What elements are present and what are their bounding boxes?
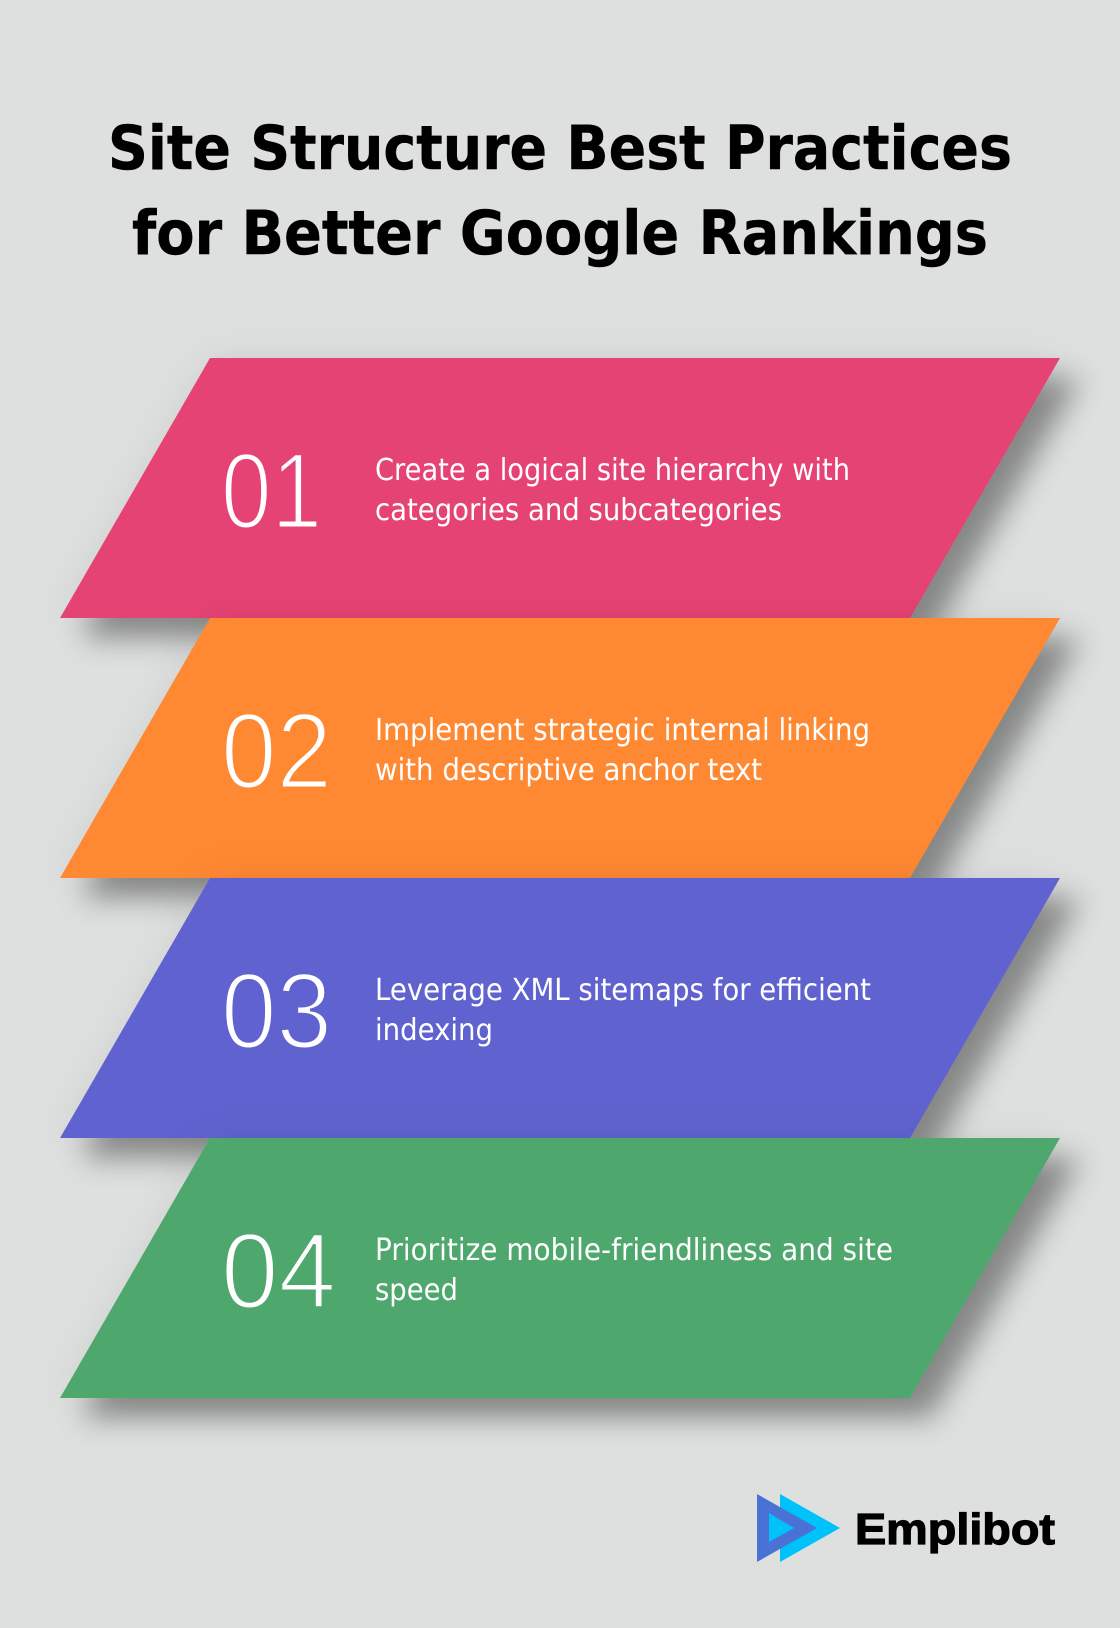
- wordmark: Emplibot: [855, 1505, 1055, 1554]
- logo: Emplibot: [757, 1494, 1055, 1562]
- panel: step 01: [60, 358, 1060, 618]
- text 02: Implement strategic internal linking: [375, 713, 870, 748]
- title: [108, 113, 1012, 269]
- panel: step 03: [60, 878, 1060, 1138]
- number 02: 02: [221, 690, 332, 811]
- title: for Better Google Rankings: [132, 198, 988, 269]
- number 03: 03: [221, 950, 332, 1071]
- band 01: [60, 358, 1060, 618]
- text 03: [375, 973, 871, 1048]
- band 04: [60, 1138, 1060, 1398]
- text 01: categories and subcategories: [375, 493, 782, 528]
- title: Site Structure Best Practices: [108, 113, 1012, 184]
- number 04: 04: [221, 1210, 336, 1331]
- icon: play triangles: [757, 1494, 840, 1562]
- panel: step 04: [60, 1138, 1060, 1398]
- text 04: speed: [375, 1273, 458, 1308]
- text 04: [375, 1233, 893, 1308]
- text 02: with descriptive anchor text: [375, 753, 762, 788]
- text 04: Prioritize mobile-friendliness and site: [375, 1233, 893, 1268]
- text 03: indexing: [375, 1013, 493, 1048]
- band 03: [60, 878, 1060, 1138]
- text 03: Leverage XML sitemaps for efficient: [375, 973, 871, 1008]
- number 01: 01: [221, 430, 322, 551]
- band 02: [60, 618, 1060, 878]
- panel: step 02: [60, 618, 1060, 878]
- text 01: Create a logical site hierarchy with: [375, 453, 850, 488]
- text 02: [375, 713, 870, 788]
- text 01: [375, 453, 850, 528]
